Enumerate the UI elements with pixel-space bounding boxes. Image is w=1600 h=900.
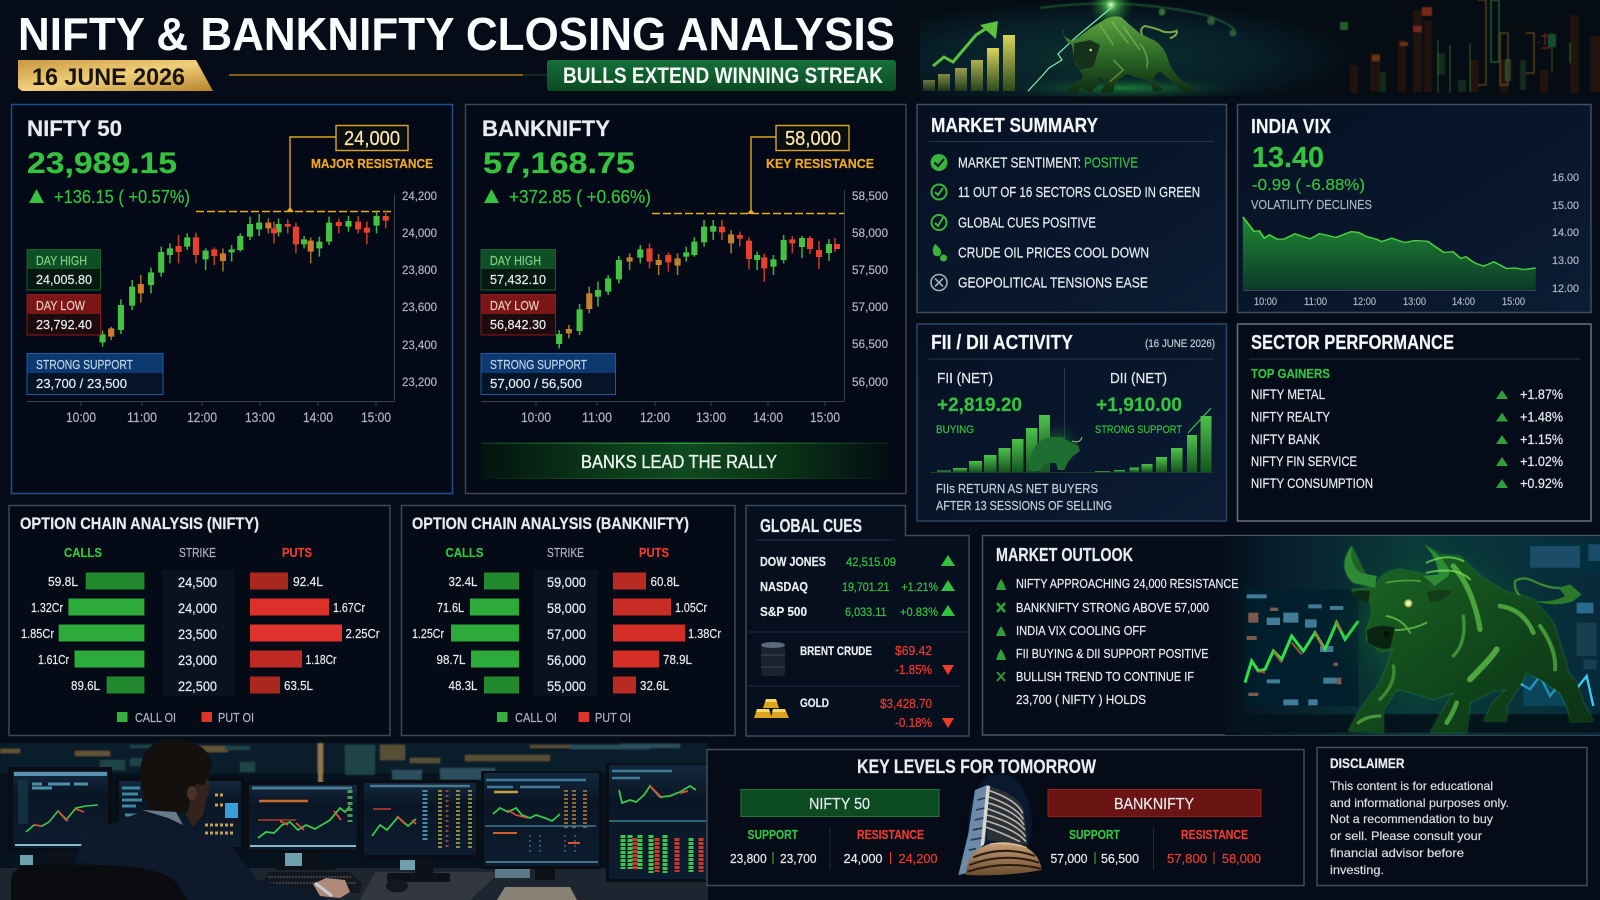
dii figures: STRONG SUPPORT [1095, 424, 1182, 436]
column headers: STRIKE [547, 545, 584, 560]
call values: 1.25Cr [412, 626, 445, 641]
row: brent crude: $69.42 [895, 643, 932, 658]
put values: 92.4L [293, 574, 323, 589]
office background lights [0, 743, 707, 784]
call values: 48.3L [448, 678, 478, 693]
strikes: 23,500 [178, 626, 217, 642]
change: +372.85 ( +0.66%) [509, 187, 651, 207]
subheading: TOP GAINERS [1251, 366, 1330, 381]
axis labels: 10:00 [66, 409, 96, 425]
callout: major resistance: MAJOR RESISTANCE [311, 156, 433, 171]
callout: key resistance: 58,000 [785, 128, 841, 150]
axis labels: 13:00 [1403, 296, 1426, 308]
strikes: 24,500 [178, 574, 217, 590]
nifty levels: SUPPORT [748, 827, 798, 842]
heading: FII / DII ACTIVITY [931, 332, 1074, 354]
nifty levels: RESISTANCE [857, 827, 924, 842]
item 5: BULLISH TREND TO CONTINUE IF [1016, 670, 1194, 684]
banknifty levels: 56,500 [1101, 851, 1139, 866]
day high: DAY HIGH [490, 254, 541, 268]
background candlesticks [1340, 0, 1600, 93]
candlestick chart [481, 190, 844, 406]
strikes: 56,000 [547, 652, 586, 668]
banknifty levels: SUPPORT [1069, 827, 1120, 842]
row: gold: $3,428.70 [880, 696, 932, 711]
note: AFTER 13 SESSIONS OF SELLING [936, 498, 1112, 513]
item: sectors: 11 OUT OF 16 SECTORS CLOSED IN GREEN [958, 184, 1200, 201]
row: bank: NIFTY BANK [1251, 431, 1321, 447]
nifty levels: 24,000 [844, 851, 882, 866]
axis labels: 10:00 [1254, 296, 1277, 308]
monitor 6 [606, 763, 707, 882]
strikes [162, 570, 234, 696]
banknifty levels: RESISTANCE [1181, 827, 1248, 842]
icon: exchange building [958, 773, 1042, 875]
heading: NIFTY 50 [27, 116, 122, 141]
strikes: 55,000 [547, 678, 586, 694]
fii bar chart [937, 415, 1050, 472]
column headers: PUTS [282, 545, 312, 560]
put values: 1.18Cr [306, 652, 337, 667]
nifty levels: 24,200 [898, 851, 938, 866]
item: geopolitical: GEOPOLITICAL TENSIONS EASE [958, 274, 1148, 292]
panel: global cues [746, 506, 969, 736]
strikes: 58,000 [547, 600, 586, 616]
panel: fii dii activity [917, 324, 1226, 521]
dii figures: +1,910.00 [1096, 395, 1182, 416]
item: global cues [932, 214, 1096, 232]
note [936, 481, 1112, 513]
axis labels: 15:00 [361, 409, 391, 425]
axis labels: 23,600 [402, 300, 437, 314]
legend: PUT OI [218, 710, 254, 725]
tail [1515, 578, 1563, 599]
day low: 56,842.30 [490, 317, 546, 332]
row: gold: -0.18% [895, 715, 932, 730]
strong support: 57,000 / 56,500 [490, 376, 582, 391]
icon: gold bars [754, 699, 789, 718]
callout: key resistance [652, 126, 874, 214]
row: fin service: +1.02% [1520, 453, 1563, 469]
day low: DAY LOW [36, 299, 85, 313]
column headers: CALLS [64, 545, 102, 560]
column headers: CALLS [446, 545, 484, 560]
strikes: 57,000 [547, 626, 586, 642]
strikes: 23,000 [178, 652, 217, 668]
chair [11, 865, 188, 900]
strong support [481, 354, 616, 394]
row: gold [800, 696, 954, 730]
axis labels: 56,500 [852, 337, 888, 351]
area chart [1243, 217, 1536, 290]
day low: DAY LOW [490, 299, 539, 313]
call bars [59, 572, 144, 694]
item 3: INDIA VIX COOLING OFF [1016, 624, 1146, 638]
row: dow jones [760, 554, 955, 569]
call values: 89.6L [71, 678, 100, 693]
row: gold: GOLD [800, 696, 829, 710]
heading: DISCLAIMER [1330, 755, 1404, 771]
axis labels: 13:00 [696, 409, 726, 425]
call values [21, 574, 100, 693]
axis labels: 23,800 [402, 263, 437, 277]
heading: GLOBAL CUES [760, 516, 862, 536]
dii bar chart [1095, 408, 1212, 472]
axis labels [66, 189, 437, 425]
panel: option chain banknifty [402, 506, 735, 736]
panel: disclaimer [1317, 748, 1587, 886]
call values: 71.6L [437, 600, 464, 615]
day low [481, 294, 556, 335]
put values: 60.8L [650, 574, 680, 589]
put values [640, 574, 722, 693]
axis labels: 11:00 [582, 409, 612, 425]
icon: oil barrel [761, 642, 785, 676]
row: metal [1251, 386, 1563, 402]
heading: MARKET OUTLOOK [996, 545, 1133, 565]
body text: investing. [1330, 863, 1384, 877]
axis labels: 15.00 [1552, 200, 1579, 212]
panel: market outlook [982, 536, 1600, 735]
call values: 1.32Cr [31, 600, 64, 615]
day low: 23,792.40 [36, 317, 92, 332]
illustration: bull with city and chart [1225, 536, 1600, 735]
call values: 98.7L [436, 652, 466, 667]
dii figures [1095, 370, 1182, 436]
heading: SECTOR PERFORMANCE [1251, 332, 1454, 354]
headline badge: BULLS EXTEND WINNING STREAK [563, 63, 883, 88]
axis labels: 24,200 [402, 189, 437, 203]
legend: CALL OI [515, 710, 557, 725]
axis labels: 57,500 [852, 263, 888, 277]
row: s&p 500: S&P 500 [760, 604, 807, 619]
panel: option chain nifty [9, 506, 390, 736]
put values: 63.5L [284, 678, 313, 693]
change: -0.99 ( -6.88%) [1252, 177, 1365, 194]
axis labels: 58,500 [852, 189, 888, 203]
banknifty levels [1050, 827, 1261, 870]
legend: PUT OI [595, 710, 631, 725]
legend [117, 710, 254, 725]
banknifty levels: 57,800 [1167, 851, 1207, 866]
row: fin service [1251, 453, 1563, 469]
nifty levels: 23,700 [780, 851, 816, 866]
row: consumption: NIFTY CONSUMPTION [1251, 475, 1373, 491]
item: crude oil: CRUDE OIL PRICES COOL DOWN [958, 244, 1149, 262]
monitor 3 [246, 782, 360, 853]
row: realty [1251, 408, 1563, 424]
nifty 50 tag [741, 790, 939, 816]
row: consumption: +0.92% [1520, 475, 1563, 491]
body text: or sell. Please consult your [1330, 829, 1482, 843]
axis labels [1254, 172, 1579, 308]
row: consumption [1251, 475, 1563, 491]
axis labels: 23,200 [402, 375, 437, 389]
axis labels: 16.00 [1552, 172, 1579, 184]
legend: CALL OI [135, 710, 176, 725]
call values: 1.61Cr [38, 652, 70, 667]
row: realty: +1.48% [1520, 408, 1563, 424]
fii figures: FII (NET) [937, 370, 993, 387]
nifty levels: 23,800 [730, 851, 767, 866]
item 2: BANKNIFTY STRONG ABOVE 57,000 [1016, 601, 1209, 615]
item: sentiment: MARKET SENTIMENT: [958, 154, 1081, 172]
put values: 1.38Cr [688, 626, 722, 641]
body text: financial advisor before [1330, 846, 1464, 860]
strong support: STRONG SUPPORT [490, 358, 587, 372]
row: s&p 500 [760, 604, 955, 619]
day high [481, 250, 556, 290]
banknifty tag [1048, 790, 1261, 816]
row: brent crude: BRENT CRUDE [800, 644, 872, 658]
icon: rising bars [923, 35, 1015, 91]
axis labels: 13.00 [1552, 255, 1579, 267]
put values: 2.25Cr [346, 626, 380, 641]
callout: major resistance [196, 126, 433, 212]
rally banner: BANKS LEAD THE RALLY [581, 452, 777, 472]
rally banner [481, 442, 889, 479]
monitor 2 [115, 777, 245, 850]
header banner art: bull and candles [900, 0, 1600, 100]
price: 23,989.15 [27, 147, 177, 180]
desk [0, 868, 708, 900]
row: fin service: NIFTY FIN SERVICE [1251, 453, 1357, 469]
put values [284, 574, 380, 693]
fii figures: +2,819.20 [937, 395, 1022, 416]
row: realty: NIFTY REALTY [1251, 408, 1331, 424]
axis labels: 14:00 [1452, 296, 1475, 308]
muzzle [1367, 626, 1395, 649]
column headers [64, 545, 312, 560]
day high: 24,005.80 [36, 272, 92, 287]
row: metal: NIFTY METAL [1251, 386, 1325, 402]
body text [1330, 779, 1509, 877]
strikes: 59,000 [547, 574, 586, 590]
panel: india vix [1238, 104, 1591, 312]
column headers [446, 545, 669, 560]
date: (16 JUNE 2026) [1145, 338, 1215, 350]
item: sentiment: POSITIVE [1084, 154, 1138, 172]
call values: 1.85Cr [21, 626, 55, 641]
panel: market summary [917, 104, 1226, 312]
axis labels: 12:00 [640, 409, 670, 425]
muscle highlights [1358, 557, 1555, 723]
row: metal: +1.87% [1520, 386, 1563, 402]
strong support [27, 354, 163, 394]
row: bank [1251, 431, 1563, 447]
axis labels: 10:00 [521, 409, 551, 425]
person [76, 740, 350, 900]
call bars [451, 572, 519, 694]
axis labels: 11:00 [1304, 296, 1327, 308]
axis labels: 11:00 [127, 409, 157, 425]
axis labels: 14:00 [303, 409, 333, 425]
nifty levels [730, 827, 938, 870]
row: nasdaq: +1.21% [902, 580, 938, 594]
icon: small bull [1029, 421, 1082, 471]
ear [1427, 590, 1452, 602]
axis labels: 14:00 [753, 409, 783, 425]
note: FIIs RETURN AS NET BUYERS [936, 481, 1098, 496]
axis labels: 13:00 [245, 409, 275, 425]
axis labels: 15:00 [810, 409, 840, 425]
body [1345, 544, 1593, 733]
put values: 78.9L [663, 652, 692, 667]
row: s&p 500: +0.83% [900, 605, 938, 619]
heading: BANKNIFTY [482, 116, 610, 141]
value: 13.40 [1252, 142, 1324, 174]
monitor 5 [481, 771, 601, 869]
axis labels: 15:00 [1502, 296, 1525, 308]
banknifty levels: 57,000 [1050, 851, 1088, 866]
callout: major resistance: 24,000 [344, 128, 400, 150]
call values: 32.4L [448, 574, 478, 589]
axis labels: 56,000 [852, 375, 888, 389]
item 4: FII BUYING & DII SUPPORT POSITIVE [1016, 647, 1208, 661]
bull glow [1345, 544, 1593, 733]
row: brent crude [800, 643, 954, 677]
row: s&p 500: 6,033.11 [845, 605, 887, 619]
monitor 4 [361, 780, 490, 858]
row: nasdaq: NASDAQ [760, 579, 808, 594]
horns [1345, 546, 1377, 588]
banknifty tag: BANKNIFTY [1114, 796, 1194, 813]
axis labels: 58,000 [852, 226, 888, 240]
heading: OPTION CHAIN ANALYSIS (BANKNIFTY) [412, 514, 689, 533]
keyboard and mouse [258, 872, 577, 900]
strong support: 23,700 / 23,500 [36, 376, 127, 391]
day high: 57,432.10 [490, 272, 546, 287]
axis labels: 24,000 [402, 226, 437, 240]
axis labels: 14.00 [1552, 227, 1579, 239]
dii figures: DII (NET) [1110, 370, 1167, 387]
axis labels: 12.00 [1552, 283, 1579, 295]
column headers: STRIKE [179, 545, 216, 560]
day high [27, 250, 100, 290]
panel: key levels for tomorrow [707, 750, 1304, 886]
illustration: green bull [1000, 0, 1250, 100]
day high: DAY HIGH [36, 254, 87, 268]
heading: INDIA VIX [1251, 116, 1332, 138]
panel: nifty 50 [12, 104, 452, 494]
axis labels: 12:00 [187, 409, 217, 425]
put values: 1.05Cr [675, 600, 708, 615]
legend [497, 710, 631, 725]
strikes [534, 570, 598, 696]
put values: 32.6L [640, 678, 669, 693]
change: +136.15 ( +0.57%) [54, 187, 190, 207]
panel: banknifty [466, 104, 906, 494]
strikes: 22,500 [178, 678, 217, 694]
axis labels: 12:00 [1353, 296, 1376, 308]
day low [27, 294, 100, 335]
icon: rising arrow [933, 21, 998, 66]
row: dow jones: DOW JONES [760, 554, 826, 569]
nifty 50 tag: NIFTY 50 [809, 796, 870, 813]
fii figures: BUYING [936, 424, 974, 436]
put bars [613, 572, 685, 694]
date ribbon: 16 JUNE 2026 [32, 64, 185, 91]
item 5 continued: 23,700 ( NIFTY ) HOLDS [1016, 693, 1146, 707]
heading: KEY LEVELS FOR TOMORROW [857, 757, 1096, 778]
panel: sector performance [1238, 324, 1591, 521]
axis labels [521, 189, 888, 425]
row: nasdaq [760, 579, 955, 594]
callout: key resistance: KEY RESISTANCE [766, 156, 874, 171]
note: VOLATILITY DECLINES [1251, 197, 1372, 212]
strikes: 24,000 [178, 600, 217, 616]
body text: and informational purposes only. [1330, 796, 1509, 810]
price: 57,168.75 [483, 147, 635, 180]
eye [1404, 599, 1412, 607]
call values: 59.8L [48, 574, 78, 589]
column headers: PUTS [639, 545, 669, 560]
light beam [1421, 536, 1427, 546]
call values [412, 574, 478, 693]
heading: OPTION CHAIN ANALYSIS (NIFTY) [20, 514, 259, 533]
item: global cues: GLOBAL CUES POSITIVE [958, 214, 1096, 232]
axis labels: 23,400 [402, 338, 437, 352]
illustration: trader at monitors [0, 740, 708, 900]
body text: This content is for educational [1330, 779, 1493, 793]
put bars [250, 572, 342, 694]
heading: MARKET SUMMARY [931, 115, 1099, 137]
put values: 1.67Cr [333, 600, 366, 615]
monitor stands [20, 850, 555, 882]
title: NIFTY & BANKNIFTY CLOSING ANALYSIS [18, 8, 895, 60]
banknifty levels: 58,000 [1222, 851, 1261, 866]
axis labels: 57,000 [852, 300, 888, 314]
row: bank: +1.15% [1520, 431, 1563, 447]
item 1: NIFTY APPROACHING 24,000 RESISTANCE [1016, 577, 1238, 591]
row: dow jones: 42,515.09 [846, 555, 896, 569]
trading screens behind the bull [1245, 543, 1600, 706]
row: nasdaq: 19,701.21 [842, 580, 890, 594]
strong support: STRONG SUPPORT [36, 358, 133, 372]
row: brent crude: -1.85% [895, 662, 932, 677]
monitor 1 [8, 767, 112, 850]
body text: Not a recommendation to buy [1330, 812, 1493, 826]
candlestick chart [27, 195, 394, 406]
fii figures [936, 370, 1022, 436]
